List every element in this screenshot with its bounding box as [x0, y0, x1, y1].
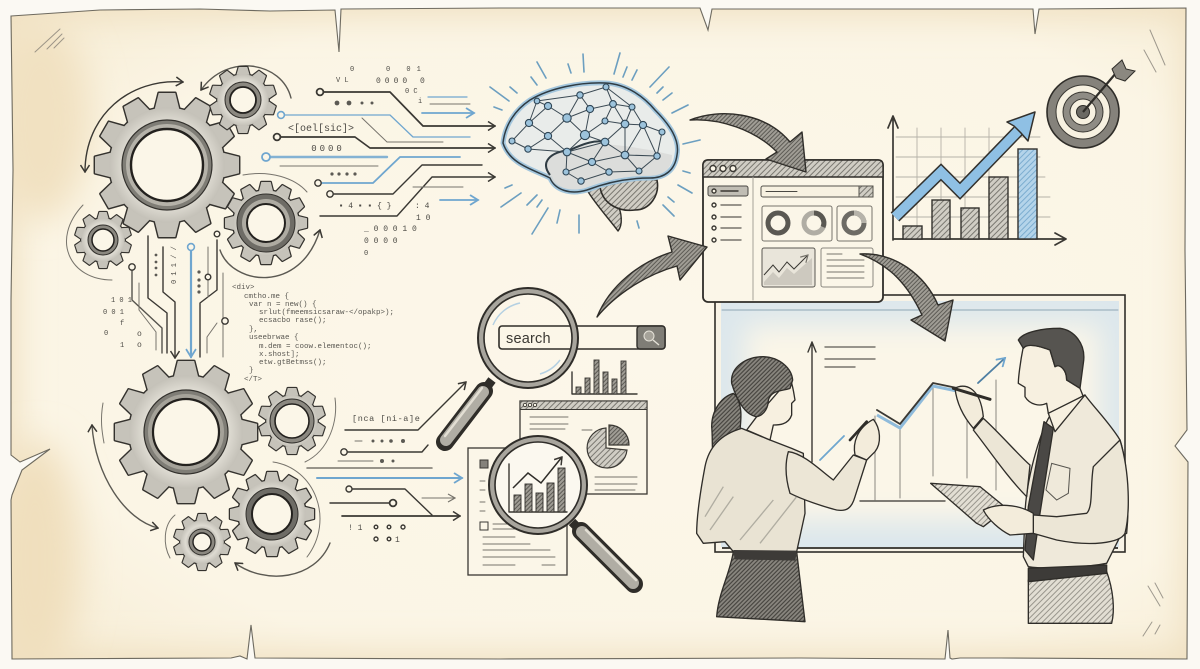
- handle: [572, 522, 636, 584]
- code glyph labels around traces: 0000: [311, 144, 345, 154]
- dashboard window: [703, 160, 883, 302]
- rotation arrows around upper gears: [66, 66, 320, 280]
- code snippet: etw.gtBetmss();: [259, 359, 327, 367]
- holding hand: [983, 505, 1033, 535]
- code glyph labels around traces: <[oel[sic]>: [288, 123, 354, 135]
- code glyph labels around traces: 0 01: [386, 66, 427, 74]
- sleeve arm: [786, 452, 867, 510]
- network nodes: [509, 84, 665, 184]
- neck and face: [1018, 345, 1083, 413]
- code glyph labels around traces: o: [137, 341, 142, 350]
- gears: upper cluster: [66, 66, 320, 280]
- cerebrum: [503, 83, 678, 192]
- rising arrow: [895, 112, 1035, 217]
- small bar chart: [572, 360, 637, 394]
- magnifier lens: [478, 288, 578, 388]
- search word: search: [506, 331, 551, 347]
- large gear: [95, 93, 239, 237]
- man presenter: [931, 328, 1128, 623]
- code glyph labels around traces: [103, 66, 431, 350]
- pie chart: [587, 425, 629, 468]
- blouse torso: [697, 428, 805, 552]
- face: [747, 378, 795, 440]
- code glyph labels around traces: _ 0 0 0 1 0: [363, 225, 417, 234]
- blouse shading: [705, 487, 797, 543]
- hair: [1018, 328, 1084, 388]
- network edges: [512, 87, 662, 181]
- code glyph labels around traces: 1: [120, 342, 124, 350]
- code snippet: srlut(fmeemsicsaraw-</opakp>);: [259, 309, 394, 317]
- code snippet: var n = new() {: [249, 301, 317, 309]
- hand and marker: [955, 386, 983, 428]
- lower circuit traces to search: [nca [ni-a]e: [352, 414, 420, 424]
- code glyph labels around traces: 0: [364, 250, 368, 258]
- gears: lower cluster: [92, 361, 336, 576]
- bars: [903, 149, 1037, 239]
- code glyph labels around traces: i: [418, 98, 422, 106]
- trousers: [1028, 572, 1113, 623]
- curved arrow: brain to dashboard: [690, 114, 806, 172]
- skirt: [717, 552, 805, 622]
- code snippet: [232, 284, 394, 384]
- lower circuit traces to search: [307, 382, 466, 545]
- code snippet: x.shost];: [259, 351, 300, 359]
- medium lower gear: [230, 472, 314, 556]
- curved arrow: dashboard to presentation: [860, 254, 953, 341]
- code snippet: },: [249, 326, 258, 334]
- brain with neural network: [490, 53, 700, 234]
- code glyph labels around traces: 1 0: [416, 214, 431, 223]
- right lower gear: [259, 388, 325, 454]
- presentation board: [715, 295, 1125, 552]
- code snippet: useebrwae {: [249, 334, 299, 342]
- donut panels: [762, 206, 872, 241]
- shirt pocket: [1046, 463, 1070, 500]
- code glyph labels around traces: 0000 0: [376, 77, 429, 86]
- code glyph labels around traces: 0 0 0 0: [364, 237, 398, 246]
- glow rays: [490, 53, 700, 234]
- left small gear: [75, 212, 131, 268]
- code glyph labels around traces: ▪ 4 ▪ ▪ { }: [339, 202, 391, 211]
- belt: [1028, 565, 1107, 582]
- search bar: [499, 326, 665, 349]
- board chart: [808, 342, 1005, 501]
- code glyph labels around traces: 0 1 1 / /: [171, 246, 179, 284]
- window buttons: [710, 166, 736, 172]
- ponytail: [712, 393, 741, 497]
- growth chart: [888, 112, 1066, 245]
- magnifier over chart: [489, 436, 636, 584]
- code glyph labels around traces: 0 0 1: [103, 309, 124, 317]
- search bar and magnifier: [445, 288, 665, 442]
- hair: [732, 357, 793, 417]
- axes: [888, 116, 1066, 245]
- large lower gear: [115, 361, 257, 503]
- code snippet: ecsacbo rase();: [259, 317, 327, 325]
- code glyph labels around traces: : 4: [415, 202, 430, 211]
- lens chart: [509, 457, 567, 512]
- search box: [761, 186, 873, 197]
- code glyph labels around traces: f: [120, 320, 124, 328]
- code glyph labels around traces: V L: [336, 77, 349, 85]
- code snippet: }: [249, 367, 254, 375]
- code snippet: m.dem = coow.elementoc();: [259, 343, 372, 351]
- magnifier handle: [445, 380, 492, 442]
- rotation arrows around lower gears: [92, 398, 336, 576]
- woman presenter: [697, 357, 879, 622]
- hand with marker: [854, 419, 879, 460]
- mini line chart panel: [762, 248, 815, 287]
- waistband: [733, 550, 797, 561]
- lower arm: [1033, 440, 1128, 543]
- tie: [1025, 422, 1053, 560]
- brain stem and cerebellum: [587, 179, 658, 231]
- report window with pie chart: [520, 401, 647, 494]
- right gear: [225, 182, 307, 264]
- code snippet: cmtho.me {: [244, 293, 289, 301]
- grid: [896, 128, 1050, 238]
- vertical connectors between gear clusters: [129, 231, 228, 358]
- text panel: [821, 248, 873, 287]
- top right gear: [210, 67, 276, 133]
- code glyph labels around traces: 1 0 1: [111, 297, 132, 305]
- code glyph labels around traces: 0: [104, 330, 108, 338]
- collar: [1048, 395, 1085, 432]
- raised arm: [973, 418, 1030, 497]
- lens: [489, 436, 587, 534]
- curved arrow: search to dashboard: [597, 236, 707, 317]
- code glyph labels around traces: 0 C: [405, 88, 418, 96]
- lower circuit traces to search: ! 1: [348, 524, 363, 533]
- lower circuit traces to search: 1: [395, 536, 400, 545]
- code snippet: </T>: [244, 376, 263, 384]
- target with arrow: [1047, 60, 1135, 148]
- code snippet: <div>: [232, 284, 255, 292]
- code glyph labels around traces: o: [137, 330, 142, 339]
- shirt: [1023, 395, 1128, 568]
- circuit traces to brain: [262, 89, 495, 216]
- tablet: [931, 483, 1007, 527]
- code glyph labels around traces: 0: [350, 66, 354, 74]
- sidebar menu: [708, 186, 748, 242]
- small lower gear: [174, 514, 230, 570]
- document page: [468, 448, 567, 575]
